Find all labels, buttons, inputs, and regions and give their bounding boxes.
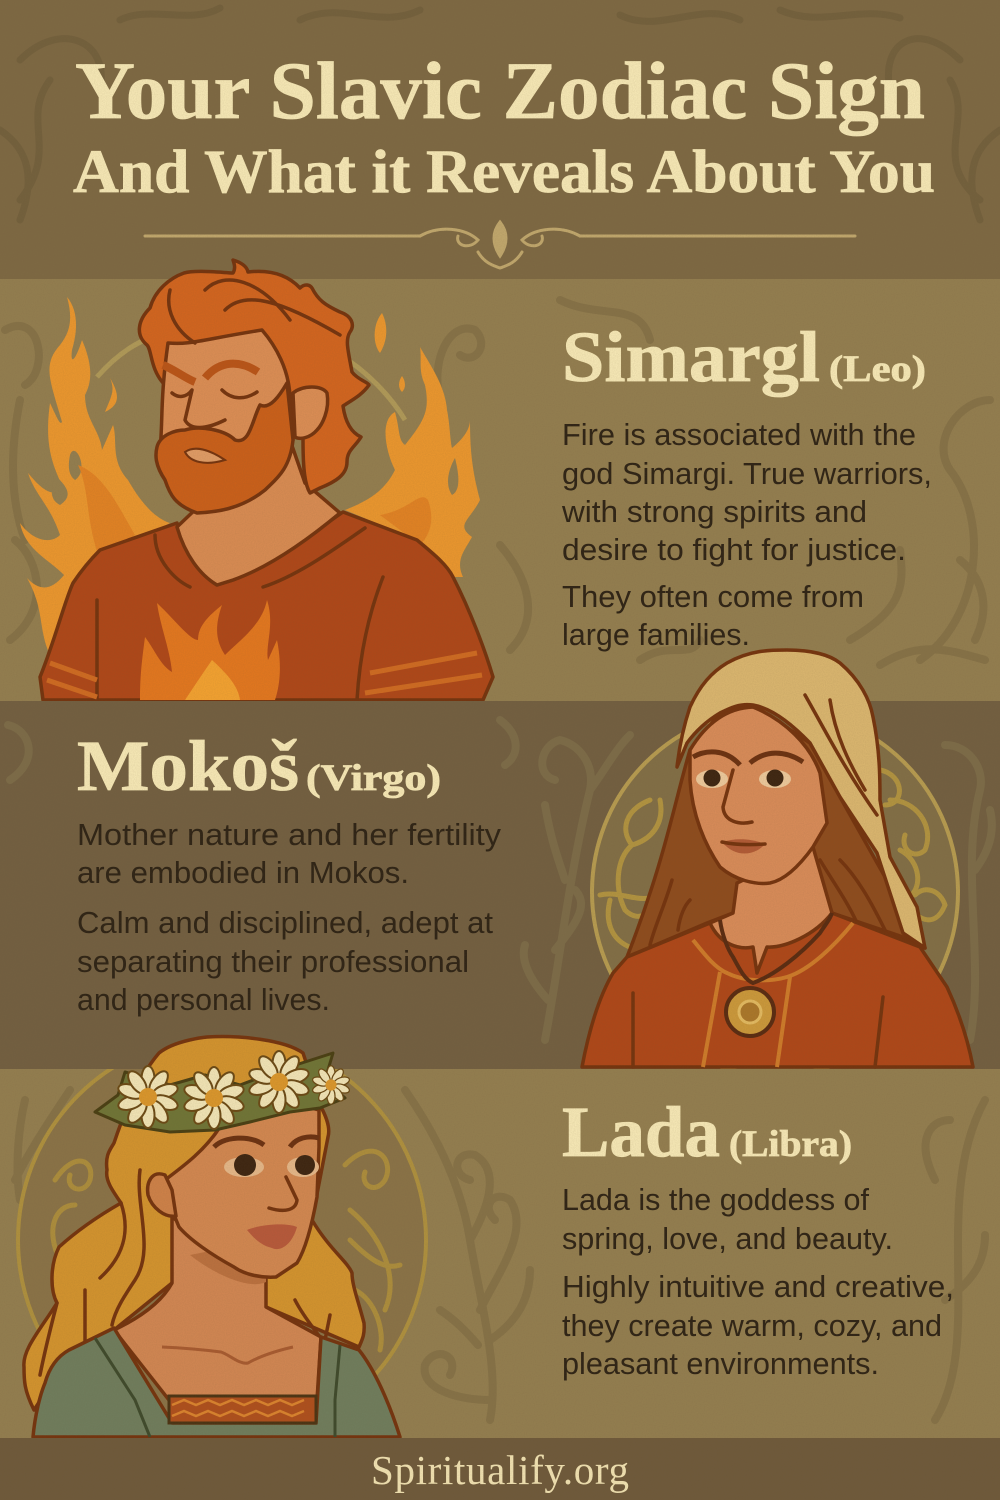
hair [627,705,925,957]
flower crown [95,1051,351,1132]
title: And What it Reveals About You [73,139,935,206]
heading: Simargl (Leo): (Leo) [829,349,926,390]
text block: Simargl [561,317,932,652]
neck [710,847,832,973]
illustration: Lada [18,1036,426,1444]
hair [24,1037,364,1410]
dress trim [169,1396,316,1423]
body text: Lada is the goddess of [562,1182,869,1217]
heading: Mokos (Virgo): (Virgo) [306,758,441,799]
icon: flames behind [20,297,480,655]
body text: spring, love, and beauty. [562,1221,893,1256]
panel: Mokos band [0,650,1000,1075]
body text [77,817,502,1017]
heading: Lada (Libra): (Libra) [729,1124,852,1165]
panel: footer band [0,1438,1000,1500]
illustration: Simargl with flames [20,260,493,700]
icon: flame on chest [140,600,280,700]
body text: they create warm, cozy, and [562,1308,942,1343]
title: Your Slavic Zodiac Sign [75,45,925,136]
face [690,707,827,883]
body text: Fire is associated with the [562,417,916,452]
head with hair and beard [139,260,369,513]
heading: Simargl (Leo) [562,317,926,397]
halo [16,1069,428,1412]
body text: Highly intuitive and creative, [562,1269,954,1304]
chest and neck [114,1217,321,1400]
body text: with strong spirits and [561,494,867,529]
halo [592,709,958,1075]
necklace pendant [720,913,832,1036]
heading: Lada (Libra): Lada [562,1092,720,1172]
body text [562,1182,954,1381]
heading: Simargl (Leo): Simargl [562,317,820,397]
footer website text: Spiritualify.org [371,1447,629,1493]
neck and collar [177,440,340,585]
body text [561,417,932,652]
body text: pleasant environments. [562,1346,879,1381]
red dress [582,913,973,1067]
panel: Lada band [0,1036,1000,1444]
body text: Calm and disciplined, adept at [77,905,493,940]
panel: Simargl band [0,260,1000,701]
green dress [33,1328,400,1437]
title [73,45,935,206]
illustration: Mokos [582,650,973,1075]
body text: separating their professional [77,944,469,979]
heading: Mokos (Virgo) [77,726,441,806]
text block: Lada [562,1092,954,1381]
headscarf [677,650,925,948]
heading: Mokos (Virgo): Mokoš [77,726,299,806]
body text: They often come from [562,579,864,614]
body text: are embodied in Mokos. [77,855,409,890]
body text: large families. [562,617,750,652]
body text: and personal lives. [77,982,330,1017]
body text: god Simargi. True warriors, [562,456,932,491]
body text: Mother nature and her fertility [77,817,502,852]
text block: Mokos [77,726,502,1017]
heading: Lada (Libra) [562,1092,852,1172]
face [165,1107,319,1277]
body: red tunic [40,512,493,700]
body text: desire to fight for justice. [562,532,906,567]
ornamental divider [145,222,855,268]
panel: header band [0,0,1000,279]
dress trim [693,923,853,1067]
